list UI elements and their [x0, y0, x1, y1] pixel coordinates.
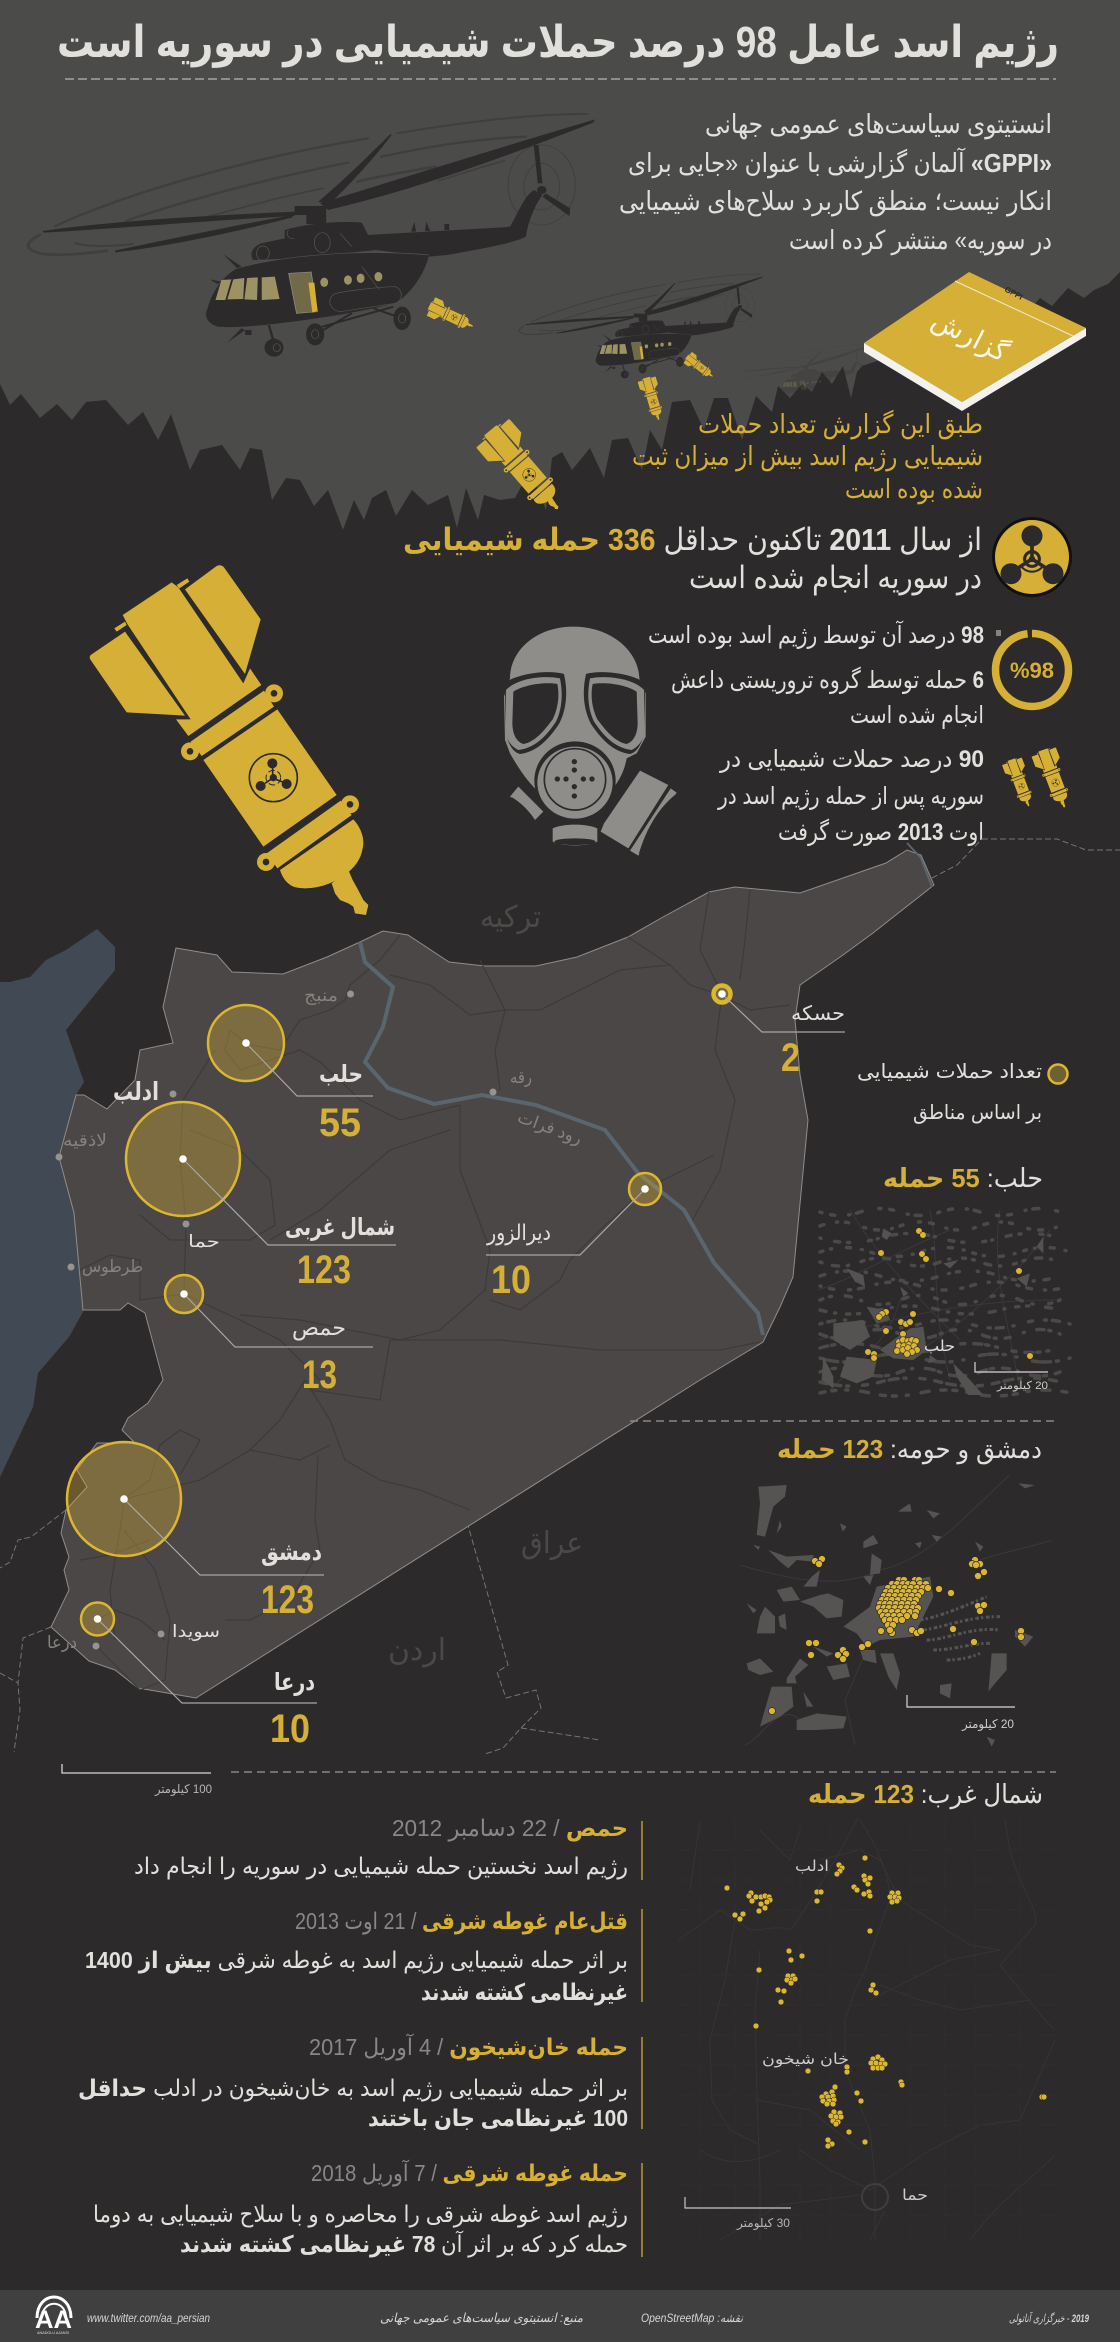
map: region labels and counts: حمص [292, 1315, 346, 1341]
map: region labels and counts: شمال غربی [285, 1214, 395, 1241]
stats text: 98 درصد آن توسط رژیم اسد بوده است [648, 620, 984, 649]
intro text block: «GPPI» آلمان گزارشی با عنوان «جایی برای [628, 147, 1052, 179]
map: region labels and counts: دمشق [261, 1539, 322, 1566]
map: Euphrates river [360, 942, 763, 1335]
map: region labels and counts: منبج [304, 986, 338, 1006]
event: Ghouta massacre 2013: بر اثر حمله شیمیایی رژیم اسد به غوطه شرقی بیش از 1400 [85, 1947, 628, 1974]
intro text block: انستیتوی سیاست‌های عمومی جهانی [705, 109, 1052, 140]
headline: 336 chemical attacks: در سوریه انجام شده است [689, 560, 982, 596]
map: region labels and counts: رود فرات [515, 1107, 585, 1148]
panel: Aleppo map: 20 کیلومتر [996, 1380, 1048, 1392]
map: region labels and counts: حما [188, 1232, 220, 1251]
icon: report book: گزارش [927, 303, 1014, 369]
event: Ghouta 2018: رژیم اسد غوطه شرقی را محاصره و با سلاح شیمیایی به دوما [93, 2201, 628, 2228]
map: country labels: ترکیه [480, 901, 541, 934]
map: region labels and counts: 2 [781, 1036, 800, 1080]
map: leader lines [98, 994, 845, 1703]
legend: تعداد حملات شیمیایی [857, 1061, 1042, 1083]
map: region labels and counts: حسکه [791, 1003, 845, 1025]
headline: 336 chemical attacks [403, 522, 982, 596]
map: region labels and counts: 55 [319, 1101, 361, 1145]
event: Homs 2012 [134, 1815, 642, 1880]
map: region labels and counts: سویدا [172, 1622, 220, 1641]
event: Ghouta massacre 2013 [85, 1908, 642, 2006]
map: Syria [51, 850, 934, 1698]
map: country labels: عراق [521, 1527, 583, 1560]
map: region labels and counts: 123 [297, 1248, 351, 1292]
event: Ghouta 2018 [93, 2159, 642, 2258]
event: Ghouta 2018: حمله غوطه شرقی / 7 آوریل 2018 [311, 2159, 628, 2187]
map: region labels and counts: درعا [274, 1669, 315, 1696]
footer: نقشه: OpenStreetMap [641, 2313, 744, 2325]
icon: falling bomb four [474, 415, 559, 517]
map: region labels and counts: طرطوس [82, 1257, 143, 1276]
panel: sky background with treeline [0, 0, 1120, 530]
stats text: 90 درصد حملات شیمیایی در [719, 746, 984, 773]
legend [857, 1061, 1068, 1124]
heading: Aleppo: حلب: 55 حمله [883, 1163, 1043, 1193]
map: sea [0, 929, 115, 1477]
map: region labels and counts: لاذقیه [63, 1131, 107, 1150]
title: رژیم اسد عامل 98 درصد حملات شیمیایی در سوریه است [57, 18, 1059, 68]
icon: 98 percent ring: %98 [1010, 658, 1054, 683]
map scale: 100 km [62, 1764, 212, 1797]
heading: North-west: شمال غرب: 123 حمله [808, 1779, 1043, 1810]
panel: north-west map [678, 1779, 1055, 2240]
icon: main helicopter [28, 114, 595, 357]
stats text: انجام شده است [850, 702, 984, 729]
event: Khan Sheikhoun 2017: 100 غیرنظامی جان باختند [368, 2105, 628, 2132]
event: Homs 2012: حمص / 22 دسامبر 2012 [392, 1815, 628, 1842]
map: region labels and counts: درعا [47, 1633, 77, 1652]
panel: north-west map: خان شیخون [762, 2051, 849, 2068]
panel: north-west map: 30 کیلومتر [736, 2216, 790, 2231]
icon: chemical hazard badge [992, 517, 1072, 597]
icon: falling bomb three [629, 372, 672, 420]
icon: falling bomb one [421, 288, 473, 344]
event: Khan Sheikhoun 2017 [78, 2033, 642, 2132]
icon: Anadolu Agency logo: ANADOLU AJANSI [37, 2330, 69, 2335]
map: attack circles [67, 986, 730, 1636]
map: region labels and counts: دیرالزور [486, 1220, 551, 1245]
map: region labels and counts: 123 [261, 1578, 314, 1622]
event: Ghouta 2018: حمله کرد که بر اثر آن 78 غیرنظامی کشته شدند [180, 2230, 628, 2258]
map: region labels and counts: حلب [319, 1061, 363, 1088]
event: Ghouta massacre 2013: غیرنظامی کشته شدند [421, 1979, 628, 2006]
footer: منبع: انستیتوی سیاست‌های عمومی جهانی [380, 2311, 583, 2326]
icon: second helicopter [519, 274, 763, 378]
map: city dots [94, 990, 726, 1623]
gold report text: شده بوده است [845, 474, 983, 505]
icon: report book: GPPI [1003, 285, 1024, 302]
map: region labels and counts: 13 [302, 1353, 337, 1397]
panel: north-west map: حما [902, 2187, 928, 2204]
headline: 336 chemical attacks: از سال 2011 تاکنون حداقل 336 حمله شیمیایی [403, 522, 982, 558]
icon: 98 percent ring [996, 630, 1068, 706]
event: Khan Sheikhoun 2017: بر اثر حمله شیمیایی رژیم اسد به خان‌شیخون در ادلب حداقل [78, 2075, 628, 2102]
icon: third faint helicopter [739, 344, 870, 400]
gold report text [632, 409, 983, 505]
icon: large chemical bomb [90, 565, 368, 915]
heading: Damascus: دمشق و حومه: 123 حمله [777, 1434, 1042, 1465]
intro text block: در سوریه» منتشر کرده است [789, 225, 1052, 256]
panel: Damascus map: 20 کیلومتر [961, 1717, 1014, 1732]
event: Ghouta massacre 2013: قتل‌عام غوطه شرقی / 21 اوت 2013 [295, 1908, 628, 1935]
intro text block [619, 109, 1052, 256]
stats text: سوریه پس از حمله رژیم اسد در [717, 783, 984, 810]
event: Khan Sheikhoun 2017: حمله خان‌شیخون / 4 آوریل 2017 [309, 2033, 628, 2061]
event: Homs 2012: رژیم اسد نخستین حمله شیمیایی در سوریه را انجام داد [134, 1853, 628, 1880]
footer: 2019 - خبرگزاری آناتولی [1009, 2311, 1090, 2325]
timeline: events [78, 1815, 642, 2258]
map: region labels and counts: 10 [270, 1707, 310, 1751]
intro text block: انکار نیست؛ منطق کاربرد سلاح‌های شیمیایی [619, 186, 1052, 217]
icon: Anadolu Agency logo: AA [35, 2306, 72, 2334]
panel: north-west map: ادلب [795, 1858, 829, 1875]
map: country labels: اردن [388, 1634, 446, 1667]
icon: pair of bombs [994, 743, 1079, 808]
map: region labels and counts [47, 986, 845, 1751]
footer [0, 2290, 1120, 2342]
footer: www.twitter.com/aa_persian [87, 2313, 210, 2325]
panel: Aleppo map [818, 1163, 1070, 1396]
stats text: اوت 2013 صورت گرفت [778, 818, 984, 846]
gold report text: طبق این گزارش تعداد حملات [698, 409, 983, 440]
icon: gas mask [504, 627, 677, 856]
panel: Aleppo map: حلب [924, 1338, 955, 1355]
map scale: 100 km: 100 کیلومتر [154, 1782, 212, 1797]
map: region labels and counts: ادلب [113, 1078, 159, 1106]
stats text: 6 حمله توسط گروه تروریستی داعش [671, 666, 984, 694]
map: roads [80, 890, 790, 1690]
stats text [648, 620, 984, 846]
map: neighbouring country borders [0, 839, 1120, 1754]
map: country labels [388, 901, 583, 1667]
panel: Damascus map [740, 1434, 1052, 1747]
legend: بر اساس مناطق [913, 1102, 1042, 1124]
map: region labels and counts: 10 [491, 1258, 531, 1302]
gold report text: شیمیایی رژیم اسد بیش از میزان ثبت [632, 441, 983, 472]
icon: falling bomb two [681, 348, 713, 384]
map: region labels and counts: رقه [510, 1068, 532, 1087]
icon: report book [864, 272, 1086, 411]
